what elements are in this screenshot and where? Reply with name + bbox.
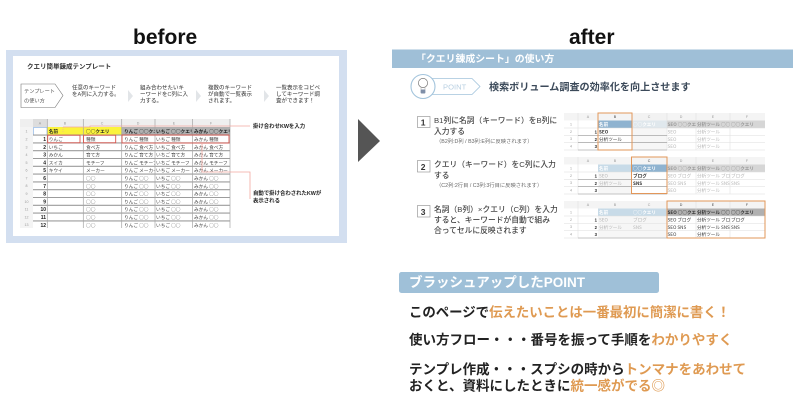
- column A: 8: [43, 192, 46, 198]
- point badge with light bulb icon: POINT: [443, 82, 467, 92]
- column F: みかん メーカー: [194, 167, 228, 174]
- column F: みかん ○○: [194, 214, 219, 221]
- step text 4: 一覧表示をコピペ: [276, 84, 321, 92]
- column C: ○○: [86, 223, 96, 229]
- column B: スイカ: [49, 160, 63, 166]
- chevron 3: [264, 90, 269, 102]
- column letters: [39, 122, 213, 126]
- row numbers: 8: [26, 184, 28, 188]
- step 1 sheet: 4: [570, 144, 572, 148]
- step 3 sheet: SEO ○○クエリ: [668, 209, 701, 216]
- points heading: ブラッシュアップしたPOINT: [409, 274, 586, 290]
- callout: auto generated keywords: [202, 143, 322, 204]
- column A: 5: [43, 168, 46, 174]
- step 1 sheet: 3: [595, 144, 598, 149]
- column D: [124, 128, 155, 228]
- column C: 種類: [86, 136, 96, 143]
- step 3 sheet: B: [614, 203, 617, 207]
- step 2 sheet: 2: [595, 181, 598, 186]
- step 2 sheet: SEO ブログ: [668, 172, 692, 180]
- step 3 sheet: 分析ツール SNS: [697, 224, 730, 231]
- row numbers: 11: [25, 208, 28, 212]
- column F: みかん 育て方: [194, 152, 223, 159]
- column B: りんご: [49, 136, 63, 143]
- step 3 sheet: SEO ブログ: [668, 216, 692, 224]
- step 1 sheet: 分析ツール: [697, 143, 720, 150]
- step 2 sheet: SEO: [599, 174, 608, 180]
- column D: りんご メーカー: [124, 167, 158, 174]
- chevron 2: [196, 90, 201, 102]
- step 3 text: すると、キーワードが自動で組み: [434, 214, 550, 224]
- point 3: おくと、資料にしたときに統一感がでる◎: [409, 374, 665, 394]
- heading: before: before: [133, 26, 197, 49]
- step 3 sheet: D: [680, 203, 683, 207]
- chevron 1: [128, 90, 133, 102]
- step 1 sheet: ○○クエリ: [731, 121, 754, 128]
- step 2 sheet: ブログ: [633, 172, 647, 180]
- step 1 text: [418, 115, 557, 145]
- step 1 text: 1: [421, 118, 426, 128]
- step 3 sheet: 名前: [599, 209, 609, 216]
- column E: いちご ○○クエリ: [156, 128, 195, 135]
- step 2 sheet: F: [746, 159, 749, 163]
- column C: [86, 128, 109, 229]
- row numbers: 12: [24, 215, 28, 219]
- point 1: このページで伝えたいことは一番最初に簡潔に書く！: [409, 304, 730, 320]
- step 1 sheet: D: [680, 115, 683, 119]
- step 1 sheet: 1: [570, 122, 572, 126]
- column A: 4: [43, 160, 46, 166]
- step 3 sheet: SEO SNS: [668, 225, 686, 231]
- step 2 sheet: ブログ: [731, 172, 745, 180]
- step text 1: をA列に入力する。: [72, 90, 120, 98]
- step 3 sheet: 1: [570, 210, 572, 214]
- header band: 「クエリ錬成シート」の使い方: [416, 52, 554, 65]
- flow label: template usage: [21, 84, 63, 108]
- callout: input combination keyword: 掛け合わせKWを入力: [253, 122, 305, 130]
- point badge with light bulb icon: [411, 74, 480, 98]
- column D: りんご ○○クエリ: [124, 128, 163, 135]
- column E: [156, 128, 195, 229]
- points heading: [399, 272, 659, 293]
- column E: いちご ○○: [156, 222, 181, 229]
- column A: 9: [43, 199, 46, 205]
- step 3 sheet: 2: [595, 225, 598, 230]
- step 1 sheet: SEO: [668, 130, 677, 136]
- step 1 text: B1列に名詞（キーワード）をB列に: [434, 115, 557, 125]
- row numbers: 1: [26, 130, 28, 134]
- column D: りんご 種類: [124, 136, 149, 143]
- column A: 11: [41, 215, 46, 221]
- point headline: 検索ボリューム調査の効率化を向上させます: [489, 80, 691, 94]
- step 3 sheet: A: [587, 203, 590, 207]
- column A: 10: [40, 207, 46, 213]
- column A: 2: [43, 145, 46, 151]
- step 1 sheet: C: [648, 115, 651, 119]
- column letters: C: [101, 122, 104, 126]
- step 3 sheet: 3: [595, 232, 598, 237]
- column E: いちご ○○: [156, 206, 181, 213]
- column F: みかん ○○: [194, 206, 219, 213]
- step 1 sheet: 分析ツール: [697, 128, 720, 136]
- step 3 text: 合ってセルに反映されます: [434, 225, 527, 235]
- column B: みかん: [49, 152, 63, 159]
- column E: いちご モチーフ: [156, 159, 190, 166]
- step text 3: 複数のキーワード: [208, 84, 252, 92]
- flow label: template usage: の使い方: [24, 96, 45, 104]
- column E: いちご ○○: [156, 175, 181, 182]
- step 2 sheet: D: [680, 159, 683, 163]
- column E: いちご メーカー: [156, 167, 190, 174]
- step 3 sheet: SEO: [668, 232, 677, 238]
- column E: いちご ○○: [156, 183, 181, 190]
- step 3 sheet: ブログ: [633, 216, 647, 224]
- step 3 sheet: SNS: [633, 225, 642, 231]
- step text 3: されます。: [208, 98, 235, 104]
- step 1 sheet: E: [712, 115, 715, 119]
- red highlight boxes: [48, 135, 229, 143]
- step 3 text: 名詞（B列）×クエリ（C列）を入力: [434, 204, 558, 214]
- step 3 sheet: C: [648, 203, 651, 207]
- panel: after slide: [392, 50, 793, 238]
- column D: りんご ○○: [124, 198, 149, 205]
- column B: [49, 128, 63, 174]
- step 3 sheet: 3: [570, 225, 572, 229]
- step 2 text: [418, 159, 556, 189]
- column C: 育て方: [86, 152, 100, 159]
- step 2 sheet: 分析ツール ブログ: [697, 172, 735, 180]
- step 2 text: （C2列:2行目 / C3列:3行目に反映されます）: [436, 181, 542, 189]
- step 2 sheet: SNS: [633, 181, 642, 187]
- step 2 sheet: C: [648, 159, 651, 163]
- step 1 sheet: 分析ツール: [697, 136, 720, 143]
- column F: みかん 種類: [194, 136, 219, 143]
- step 1 sheet: 分析ツール: [599, 136, 622, 143]
- step text 2: 力する。: [140, 96, 162, 104]
- arrow: before to after: [358, 119, 380, 162]
- column A: 7: [43, 184, 46, 190]
- column D: りんご ○○: [124, 191, 149, 198]
- panel: brush-up points: [399, 272, 746, 394]
- step 2 sheet: 名前: [599, 165, 609, 172]
- column A: [40, 137, 46, 229]
- column D: りんご 食べ方: [124, 144, 153, 151]
- column A: 6: [43, 176, 46, 182]
- step 3 sheet: E: [712, 203, 715, 207]
- step text 1: 任意のキーワード: [72, 84, 116, 92]
- heading: after: after: [569, 26, 615, 49]
- step 3 sheet: SEO: [599, 218, 608, 224]
- step 2 sheet: 分析ツール SNS: [697, 180, 730, 187]
- row numbers: 4: [26, 153, 28, 157]
- step 2 sheet: 3: [570, 181, 572, 185]
- step 1 sheet: 名前: [599, 121, 609, 128]
- step text 4: してキーワード調: [276, 91, 320, 98]
- header band: [392, 50, 793, 68]
- column B: キウイ: [49, 167, 63, 174]
- step text 4: [276, 84, 321, 104]
- step 1 sheet: 2: [570, 130, 572, 134]
- step text 2: [140, 84, 188, 104]
- column B: いちご: [49, 144, 63, 151]
- row numbers: 3: [26, 145, 28, 149]
- step 2 sheet: SEO ○○クエリ: [668, 165, 701, 172]
- step 2 text: クエリ（キーワード）をC列に入力: [434, 159, 556, 169]
- row numbers: 10: [24, 200, 28, 204]
- step 3 sheet: SNS: [731, 225, 740, 231]
- step 3 sheet: F: [746, 203, 749, 207]
- row numbers: 13: [24, 223, 28, 227]
- orange highlight: columns D to F: [667, 201, 765, 238]
- column C: ○○: [86, 215, 96, 221]
- step 2 sheet: ○○クエリ: [633, 165, 656, 172]
- step 2 sheet: 2: [570, 174, 572, 178]
- column D: りんご ○○: [124, 222, 149, 229]
- step 1 sheet: SEO: [668, 144, 677, 150]
- row numbers: 2: [26, 138, 28, 142]
- step 2 sheet: 3: [595, 188, 598, 193]
- callout: auto generated keywords: 自動で掛け合わされたKWが: [253, 189, 322, 197]
- step 1 sheet: SEO: [599, 130, 609, 136]
- row numbers: 5: [26, 161, 28, 165]
- orange highlight: column C: [632, 157, 667, 194]
- step 1 text: （B2列:D列 / B3列:E列に反映されます）: [436, 137, 533, 145]
- column C: 食べ方: [86, 144, 100, 151]
- step 2 sheet: 4: [570, 188, 572, 192]
- column F: みかん ○○: [194, 175, 219, 182]
- step 1 sheet: 2: [595, 137, 598, 142]
- step text 2: 組み合わせたいキ: [140, 84, 184, 92]
- column E: いちご ○○: [156, 191, 181, 198]
- column letters: D: [137, 122, 140, 126]
- column letters: A: [39, 122, 42, 126]
- step 3 text: 3: [421, 207, 426, 217]
- flow label: template usage: テンプレート: [24, 88, 55, 95]
- step text 1: [72, 84, 120, 98]
- column E: いちご ○○: [156, 214, 181, 221]
- step text 3: が自動で一覧表示: [208, 90, 253, 98]
- column D: りんご 育て方: [124, 152, 153, 159]
- step 3 sheet: 分析ツール: [599, 224, 622, 231]
- column C: ○○: [86, 176, 96, 182]
- column D: りんご ○○: [124, 175, 149, 182]
- step 1 sheet: [564, 113, 765, 150]
- step 1 sheet: 3: [570, 137, 572, 141]
- step 2 sheet: SEO SNS: [668, 181, 686, 187]
- step 2 sheet: SEO: [668, 188, 677, 194]
- step 1 sheet: SEO: [668, 137, 677, 143]
- step 2 sheet: 1: [570, 166, 572, 170]
- column F: みかん ○○: [194, 198, 219, 205]
- column F: みかん ○○クエリ: [194, 128, 233, 135]
- column E: いちご 育て方: [156, 152, 185, 159]
- step 2 sheet: 1: [595, 174, 598, 178]
- step 2 sheet: 分析ツール: [697, 187, 720, 194]
- row numbers: 9: [26, 192, 28, 196]
- step 3 sheet: ブログ: [731, 216, 745, 224]
- column letters: F: [210, 122, 213, 126]
- step text 4: 査ができます！: [276, 96, 315, 104]
- column D: りんご モチーフ: [124, 159, 158, 166]
- step 3 sheet: 分析ツール: [697, 231, 720, 238]
- step 2 sheet: ○○クエリ: [731, 165, 754, 172]
- row numbers: [24, 130, 28, 227]
- column F: みかん 食べ方: [194, 144, 223, 151]
- step 3 sheet: 4: [570, 232, 572, 236]
- column letters: B: [64, 122, 67, 126]
- row numbers: 6: [26, 169, 28, 173]
- step 2 sheet: [564, 157, 765, 194]
- column C: ○○: [86, 199, 96, 205]
- column C: メーカー: [86, 168, 105, 174]
- point 3: テンプレ作成・・・スプシの時からトンマナをあわせて: [409, 361, 746, 377]
- column F: みかん ○○: [194, 222, 219, 229]
- step 3 sheet: 2: [570, 218, 572, 222]
- template title: クエリ簡単錬成テンプレート: [27, 62, 111, 70]
- row numbers: 7: [26, 176, 28, 180]
- point 3: [409, 361, 746, 394]
- step 1 sheet: 分析ツール ○○クエリ: [697, 121, 744, 128]
- step text 3: [208, 84, 253, 104]
- step 2 sheet: SNS: [731, 181, 740, 187]
- point 2: 使い方フロー・・・番号を振って手順をわかりやすく: [409, 332, 732, 348]
- step text 2: ーワードをC列に入: [140, 91, 188, 98]
- column C: ○○: [86, 184, 96, 190]
- step 1 sheet: F: [746, 115, 749, 119]
- column letters: E: [173, 122, 176, 126]
- step 2 sheet: 分析ツール: [599, 180, 622, 187]
- column C: ○○: [86, 192, 96, 198]
- step 2 sheet: 分析ツール ○○クエリ: [697, 165, 744, 172]
- column F: みかん ○○: [194, 191, 219, 198]
- column C: ○○: [86, 207, 96, 213]
- step 1 sheet: B: [614, 115, 617, 119]
- column A: 1: [43, 137, 46, 143]
- column E: いちご 種類: [156, 136, 181, 143]
- step 1 sheet: ○○クエリ: [633, 121, 656, 128]
- panel: before template screenshot: [6, 50, 347, 243]
- step 1 sheet: A: [587, 115, 590, 119]
- column E: いちご 食べ方: [156, 144, 185, 151]
- step 2 sheet: E: [712, 159, 715, 163]
- step 3 sheet: ○○クエリ: [633, 209, 656, 216]
- orange highlight: column B: [598, 113, 632, 150]
- step 3 sheet: 分析ツール ○○クエリ: [697, 209, 744, 216]
- step 3 sheet: ○○クエリ: [731, 209, 754, 216]
- step 2 sheet: A: [587, 159, 590, 163]
- step 1 text: 入力する: [434, 126, 465, 136]
- column B: 名前: [49, 128, 58, 135]
- step 3 sheet: [564, 201, 765, 238]
- column D: りんご ○○: [124, 183, 149, 190]
- step 2 sheet: B: [614, 159, 617, 163]
- step 3 text: [418, 204, 558, 235]
- column C: モチーフ: [86, 160, 105, 166]
- spreadsheet table: [20, 119, 233, 229]
- column F: みかん モチーフ: [194, 159, 228, 166]
- step 2 text: 2: [421, 162, 426, 172]
- step 3 sheet: 分析ツール ブログ: [697, 216, 735, 224]
- callout: auto generated keywords: 表示される: [253, 196, 280, 204]
- column F: みかん ○○: [194, 183, 219, 190]
- column C: ○○クエリ: [86, 128, 109, 135]
- step 3 sheet: 1: [595, 218, 598, 222]
- column E: いちご ○○: [156, 198, 181, 205]
- column D: りんご ○○: [124, 206, 149, 213]
- column A: 3: [43, 153, 46, 159]
- column A: 12: [40, 223, 46, 229]
- step 1 sheet: 1: [595, 130, 598, 134]
- step 1 sheet: SEO ○○クエリ: [668, 121, 701, 128]
- column D: りんご ○○: [124, 214, 149, 221]
- column F: [194, 128, 233, 229]
- step 2 text: する: [434, 171, 450, 180]
